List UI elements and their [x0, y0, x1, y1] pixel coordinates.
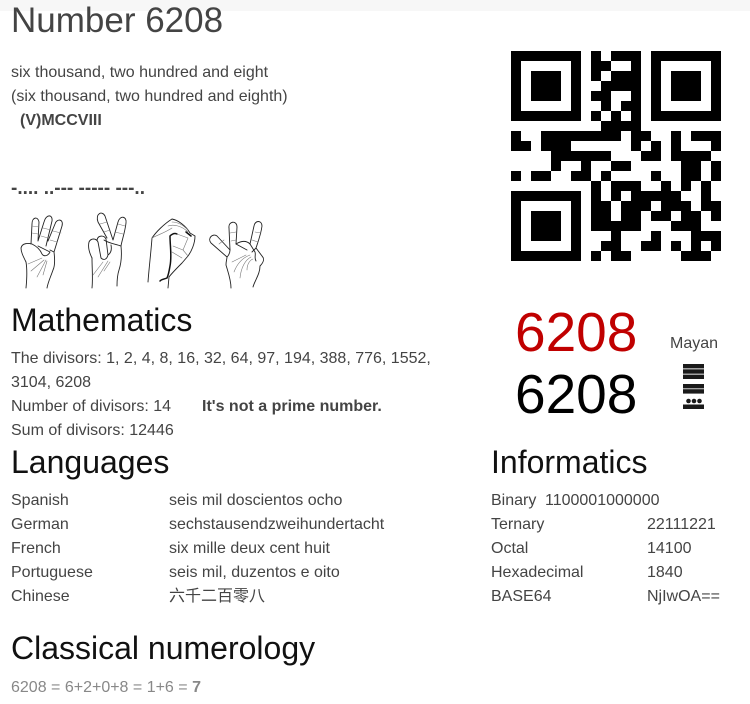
- languages table: French: [11, 540, 61, 557]
- number names and roman numeral: [11, 64, 288, 129]
- large red number: 6208: [515, 301, 637, 363]
- languages heading: Languages: [11, 444, 169, 480]
- mayan label: Mayan: [670, 335, 718, 352]
- mayan numeral icon: [683, 364, 704, 409]
- mathematics heading: Mathematics: [11, 302, 192, 338]
- informatics table: [491, 492, 720, 605]
- languages table: Chinese: [11, 588, 70, 605]
- languages table: seis mil, duzentos e oito: [169, 564, 340, 581]
- icon: hand sign 6: [21, 216, 62, 288]
- morse code: -.... ..--- ----- ---..: [11, 178, 145, 199]
- QR code: [511, 51, 721, 261]
- mathematics facts: 3104, 6208: [11, 374, 91, 391]
- informatics table: 1840: [647, 564, 683, 581]
- informatics table: 1100001000000: [545, 492, 660, 509]
- informatics table: Hexadecimal: [491, 564, 583, 581]
- mathematics facts: It's not a prime number.: [202, 398, 382, 415]
- number names and roman numeral: (V)MCCVIII: [20, 112, 102, 129]
- informatics table: Octal: [491, 540, 528, 557]
- title: Number 6208: [11, 1, 223, 40]
- informatics table: 22111221: [647, 516, 716, 533]
- mathematics facts: The divisors: 1, 2, 4, 8, 16, 32, 64, 97, 194, 388, 776, 1552,: [11, 350, 431, 367]
- languages table: Spanish: [11, 492, 69, 509]
- number names and roman numeral: six thousand, two hundred and eight: [11, 64, 268, 81]
- icon: hand sign 0: [148, 219, 195, 288]
- languages table: six mille deux cent huit: [169, 540, 330, 557]
- languages table: Portuguese: [11, 564, 93, 581]
- sign language hands: [20, 212, 264, 288]
- number names and roman numeral: (six thousand, two hundred and eighth): [11, 88, 288, 105]
- languages table: seis mil doscientos ocho: [169, 492, 342, 509]
- informatics table: 14100: [647, 540, 692, 557]
- informatics table: Ternary: [491, 516, 544, 533]
- numerology calculation: 6208 = 6+2+0+8 = 1+6 = 7: [11, 679, 201, 696]
- languages table: sechstausendzweihundertacht: [169, 516, 384, 533]
- mathematics facts: Sum of divisors: 12446: [11, 422, 174, 439]
- top page band: [0, 0, 750, 11]
- languages table: German: [11, 516, 69, 533]
- informatics table: NjIwOA==: [647, 588, 720, 605]
- languages table: 六千二百零八: [169, 588, 265, 605]
- classical numerology heading: Classical numerology: [11, 630, 315, 666]
- icon: hand sign 2: [89, 213, 126, 288]
- languages table: [11, 492, 384, 605]
- large black number: 6208: [515, 363, 637, 425]
- mathematics facts: [11, 350, 431, 439]
- informatics table: Binary: [491, 492, 536, 509]
- informatics table: BASE64: [491, 588, 551, 605]
- mathematics facts: Number of divisors: 14: [11, 398, 171, 415]
- informatics heading: Informatics: [491, 444, 647, 480]
- icon: hand sign 8: [210, 222, 263, 288]
